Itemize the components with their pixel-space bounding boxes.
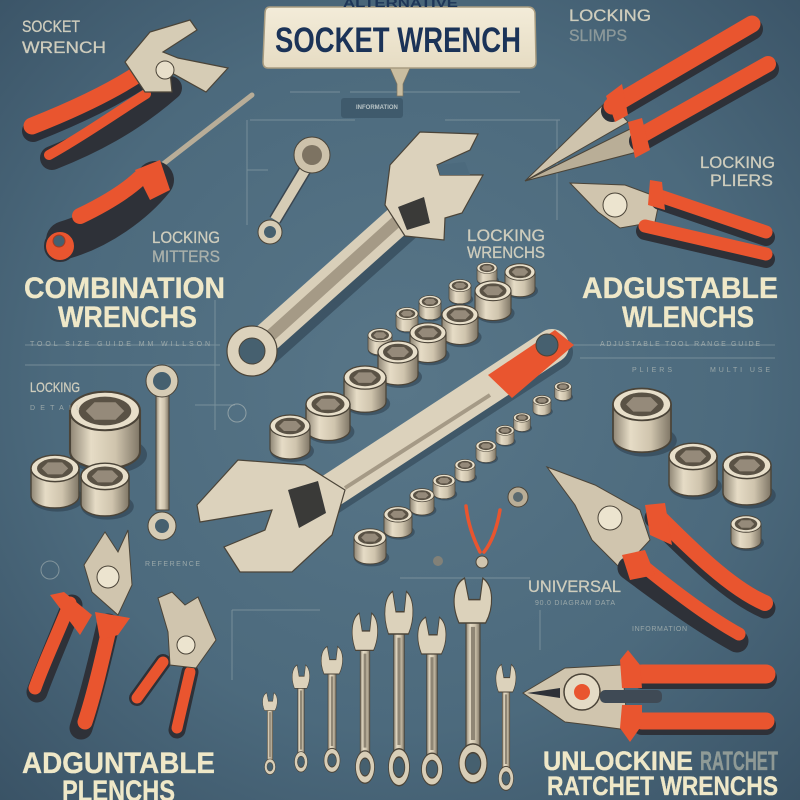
connector lines bbox=[25, 92, 775, 680]
label: locking pliers: LOCKING bbox=[700, 153, 775, 172]
fine print captions: DETAIL bbox=[30, 405, 80, 412]
tool: lower-left pliers bbox=[35, 530, 132, 728]
heading: unlocking ratchet wrenchs bbox=[543, 746, 778, 800]
label: locking top right: SLIMPS bbox=[569, 26, 627, 45]
heading: unlocking ratchet wrenchs: UNLOCKINE bbox=[543, 746, 693, 776]
sockets: right cluster bbox=[613, 388, 776, 551]
fine print captions: PLIERS bbox=[632, 367, 672, 374]
heading: adjustable wrenchs: WLENCHS bbox=[622, 301, 754, 334]
title text: SOCKET WRENCH bbox=[275, 21, 521, 60]
small nut details bbox=[41, 404, 528, 579]
heading: adjustable plenchs bbox=[22, 747, 215, 800]
fine print captions: REFERENCE bbox=[145, 561, 200, 568]
label: locking wrenchs: WRENCHS bbox=[467, 243, 545, 262]
tool: small lower-left wrench pliers bbox=[137, 592, 216, 730]
tool: screwdriver bbox=[45, 95, 252, 261]
label: locking top right bbox=[569, 6, 651, 45]
fine print captions: MULTI USE bbox=[710, 367, 770, 374]
plaque connector bbox=[390, 68, 410, 96]
tool: top-right long-nose pliers bbox=[525, 24, 768, 181]
title sub-label: INFORMATION bbox=[356, 105, 398, 111]
socket set: upper row bbox=[270, 262, 538, 462]
tool: small ring wrench bbox=[258, 137, 330, 244]
label: locking pliers: PLIERS bbox=[710, 171, 773, 190]
tool: top-left adjustable pliers bbox=[32, 20, 228, 158]
label: locking mitters: LOCKING bbox=[152, 228, 220, 247]
label: socket wrench bbox=[22, 17, 106, 57]
tool: middle-right pliers bbox=[547, 467, 765, 641]
wrench row bbox=[263, 578, 516, 790]
label: locking wrenchs: LOCKING bbox=[467, 226, 545, 245]
tool: tiny red pliers bbox=[466, 506, 500, 568]
label: socket wrench: WRENCH bbox=[22, 38, 106, 57]
label: locking mitters bbox=[152, 228, 220, 266]
heading: adjustable wrenchs: ADGUSTABLE bbox=[582, 272, 778, 305]
tool: vertical wrench bbox=[146, 365, 178, 540]
socket set: lower row bbox=[354, 382, 573, 566]
label: locking mitters: MITTERS bbox=[152, 247, 220, 266]
fine print captions: INFORMATION bbox=[632, 626, 687, 633]
label: locking top right: LOCKING bbox=[569, 6, 651, 25]
label: locking pliers bbox=[700, 153, 775, 190]
heading: combination wrenchs bbox=[24, 272, 225, 334]
label: locking wrenchs bbox=[467, 226, 545, 262]
label: universal: UNIVERSAL bbox=[528, 577, 621, 596]
sockets: left cluster bbox=[31, 392, 147, 520]
tool: large adjustable wrench bbox=[227, 132, 483, 376]
title sub-label bbox=[341, 98, 403, 118]
fine print captions: TOOL SIZE GUIDE MM WILLSON bbox=[30, 341, 210, 348]
heading: adjustable plenchs: ADGUNTABLE bbox=[22, 747, 215, 780]
plaque panel bbox=[263, 7, 536, 68]
tool: right locking pliers bbox=[570, 180, 766, 259]
label: locking left: LOCKING bbox=[30, 379, 80, 395]
heading: combination wrenchs: WRENCHS bbox=[58, 301, 197, 334]
tool: lower-right pliers bbox=[523, 650, 766, 742]
fine print captions: ADJUSTABLE TOOL RANGE GUIDE bbox=[600, 341, 760, 348]
title plaque bbox=[263, 0, 536, 118]
fine print captions: 90.0 DIAGRAM DATA bbox=[535, 600, 615, 607]
tool: second large wrench bbox=[197, 330, 574, 572]
label: socket wrench: SOCKET bbox=[22, 17, 80, 36]
heading: combination wrenchs: COMBINATION bbox=[24, 272, 225, 305]
heading: adjustable wrenchs bbox=[582, 272, 778, 334]
fine print captions bbox=[30, 341, 770, 633]
